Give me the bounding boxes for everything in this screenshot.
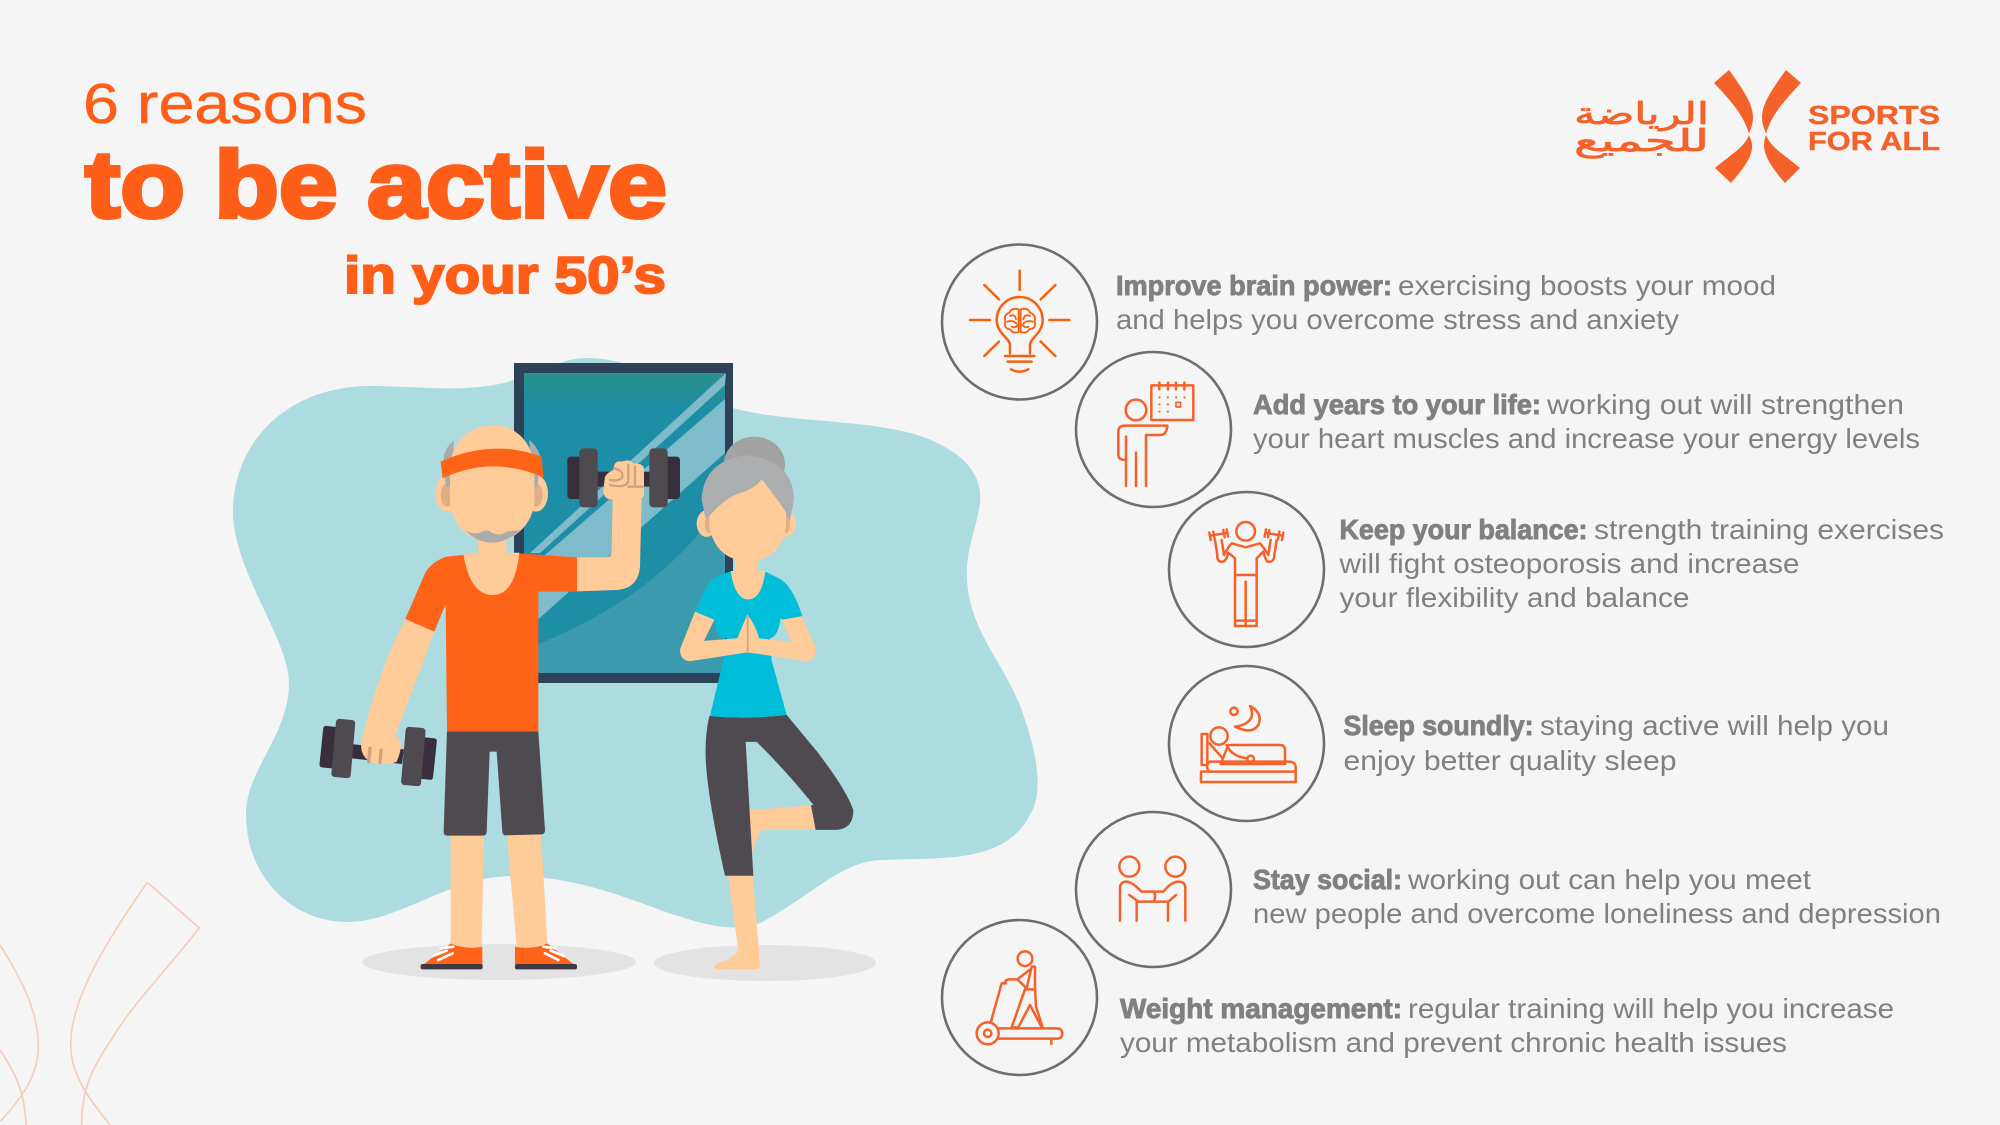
neck [735, 557, 758, 579]
legs [451, 833, 547, 948]
text: years to life: working out will strengthen [1546, 389, 1904, 420]
lower arm [361, 619, 434, 764]
circle icon: treadmill [942, 920, 1097, 1075]
logo wordmark arabic [1574, 97, 1709, 159]
shirt [405, 553, 577, 731]
circle icon: two people [1076, 812, 1231, 967]
text: years to life [1253, 389, 1920, 454]
standing leg [714, 873, 760, 969]
leggings [706, 715, 853, 876]
text: social: working out can help you meet [1407, 864, 1811, 895]
face [709, 479, 786, 561]
text: social: new people and overcome loneliness and depression [1253, 898, 1941, 929]
text: brain power: exercising boosts your mood [1398, 270, 1776, 301]
logo wordmark english [1808, 100, 1940, 156]
text: sleep: enjoy better quality sleep [1344, 745, 1676, 776]
text: years to life: your heart muscles and increase your energy levels [1253, 423, 1920, 454]
text: balance: strength training exercises [1594, 514, 1944, 545]
bent leg [748, 805, 816, 855]
circle icon: brain bulb [942, 244, 1097, 400]
text: social [1253, 864, 1941, 929]
raised dumbbell [567, 448, 680, 507]
text: weight: Weight management: [1120, 993, 1402, 1024]
head [435, 425, 548, 543]
man [319, 425, 680, 969]
mirror [514, 363, 733, 683]
text: brain power: Improve brain power: [1116, 270, 1392, 301]
lower dumbbell [319, 719, 437, 786]
title line: to be active: to be active [85, 132, 667, 238]
text: sleep [1344, 710, 1889, 776]
text: sleep: Sleep soundly: [1344, 710, 1534, 741]
logo wordmark english: SPORTS [1808, 100, 1940, 130]
text: weight [1120, 993, 1894, 1058]
top [695, 571, 802, 718]
title line: 6 reasons: 6 reasons [83, 72, 367, 136]
list: six reasons [942, 244, 1944, 1075]
floor shadows [362, 944, 876, 981]
circle icon: person in bed [1169, 666, 1324, 821]
item 1: brain power [942, 244, 1776, 400]
text: brain power: and helps you overcome stress and anxiety [1116, 304, 1679, 335]
logo: Sports For All [1574, 70, 1940, 183]
circle icon: person lifting dumbbells [1169, 492, 1324, 647]
item 6: weight [942, 920, 1894, 1075]
title line: in your 50's: in your 50’s [344, 247, 666, 305]
item 2: years to life [1076, 352, 1920, 507]
logo wordmark arabic: للجميع [1574, 124, 1709, 159]
neck [478, 537, 507, 560]
text: brain power [1116, 270, 1776, 335]
title [83, 72, 667, 305]
decorative logo outline [0, 882, 199, 1125]
text: weight: regular training will help you increase [1408, 993, 1894, 1024]
bun and hair [697, 437, 796, 537]
item 5: social [1076, 812, 1941, 967]
text: years to life: Add years to your life: [1253, 389, 1541, 420]
arms in prayer pose [680, 612, 816, 661]
logo mark [1714, 70, 1801, 183]
text: balance: Keep your balance: [1340, 514, 1588, 545]
text: balance [1338, 514, 1944, 613]
raised arm [577, 460, 644, 591]
text: weight: your metabolism and prevent chronic health issues [1120, 1027, 1787, 1058]
illustration: active seniors [233, 358, 1038, 981]
text: balance: your flexibility and balance [1340, 582, 1690, 613]
logo wordmark english: FOR ALL [1808, 126, 1940, 156]
item 4: sleep [1169, 666, 1889, 821]
background blob [233, 358, 1038, 927]
shoes [421, 943, 577, 969]
woman [680, 437, 853, 969]
text: balance: will fight osteoporosis and increase [1338, 548, 1800, 579]
logo wordmark arabic: الرياضة [1574, 97, 1709, 132]
text: social: Stay social: [1253, 864, 1402, 895]
shorts [444, 731, 545, 836]
circle icon: person with calendar [1076, 352, 1231, 507]
item 3: balance [1169, 492, 1944, 647]
text: sleep: staying active will help you [1540, 710, 1889, 741]
